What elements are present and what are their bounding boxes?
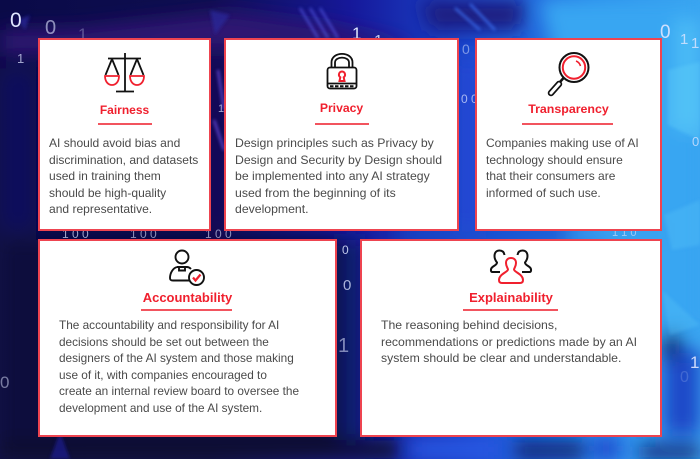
icon: padlock <box>326 53 358 90</box>
text: Transparency description <box>486 136 639 200</box>
panel: Explainability <box>360 239 662 437</box>
background: digital binary technology image: 0 <box>342 243 349 257</box>
panel: Transparency <box>475 38 662 231</box>
background: digital binary technology image: 0 <box>10 9 22 32</box>
text: Fairness description: used in training them <box>49 169 161 183</box>
background: digital binary technology image: 1 <box>680 31 688 48</box>
text: Transparency description: Companies making use of AI <box>486 136 639 150</box>
icon: magnifying glass <box>548 52 590 96</box>
panel: Privacy <box>224 38 459 231</box>
background: digital binary technology image: 0 0 <box>461 92 478 106</box>
text: Accountability description: The accountability and responsibility for AI <box>59 318 279 332</box>
text: Accountability description: decisions should be set out between the <box>59 335 269 349</box>
text: Transparency description: that their consumers are <box>486 169 615 183</box>
background: digital binary technology image: 1 <box>352 24 361 43</box>
text: Accountability description <box>59 318 299 415</box>
text: Transparency description: informed of such use. <box>486 186 601 200</box>
background: digital binary technology image: 0 <box>343 277 351 294</box>
text: Fairness description: and representative. <box>49 202 152 216</box>
background: digital binary technology image: 1 <box>218 103 224 115</box>
text: Accountability description: use of it, with companies encouraged to <box>59 368 267 382</box>
heading: Transparency: Transparency <box>528 102 609 116</box>
background: digital binary technology image: 0 <box>660 22 671 43</box>
text: Privacy description: used from the beginning of its <box>235 186 396 200</box>
background: digital binary technology image: 0 <box>415 40 422 55</box>
background: digital binary technology image: 1 <box>78 25 87 44</box>
background: digital binary technology image: 1 <box>374 33 383 50</box>
text: Privacy description: Design principles such as Privacy by <box>235 136 434 150</box>
background: digital binary technology image: 1 0 0 <box>205 227 232 241</box>
text: Fairness description: discrimination, and datasets <box>49 153 198 167</box>
panel: Accountability <box>38 239 337 437</box>
text: Explainability description <box>381 318 637 365</box>
background: digital binary technology image: 1 <box>338 335 349 357</box>
text: Privacy description: Design and Security by Design should <box>235 153 442 167</box>
heading: Explainability: Explainability <box>469 290 553 305</box>
background: digital binary technology image: 0 <box>0 373 9 392</box>
background: digital binary technology image: 0 <box>45 17 56 39</box>
text: Accountability description: designers of the AI system and those making <box>59 351 294 365</box>
text: Accountability description: create an internal review board to oversee the <box>59 384 299 398</box>
heading: Privacy: Privacy <box>320 101 363 115</box>
text: Fairness description: AI should avoid bias and <box>49 136 180 150</box>
text: Accountability description: development and use of the AI system. <box>59 401 262 415</box>
text: Privacy description: be implemented into any AI strategy <box>235 169 430 183</box>
icon: three people group <box>490 250 532 284</box>
text: Fairness description <box>49 136 198 216</box>
panel: Fairness <box>38 38 211 231</box>
text: Explainability description: The reasoning behind decisions, <box>381 318 557 332</box>
icon: balance scales <box>104 53 145 92</box>
icon: person with check badge <box>169 250 205 286</box>
background: digital binary technology image: 0 <box>462 41 470 57</box>
text: Explainability description: system should be clear and understandable. <box>381 351 621 365</box>
background: digital binary technology image: 0 <box>394 37 402 54</box>
heading: Fairness: Fairness <box>100 103 149 117</box>
background: digital binary technology image: 1 <box>690 353 699 372</box>
text: Privacy description <box>235 136 442 216</box>
text: Fairness description: should be high-quality <box>49 186 166 200</box>
background: digital binary technology image: 1 <box>17 51 24 66</box>
heading: Accountability: Accountability <box>143 290 232 305</box>
background: digital binary technology image: 0 <box>680 369 689 386</box>
background: digital binary technology image: 0 <box>692 134 699 149</box>
background: digital binary technology image: 1 <box>691 35 699 52</box>
text: Explainability description: recommendations or predictions made by an AI <box>381 335 637 349</box>
background: digital binary technology image: 1 0 0 <box>130 227 157 241</box>
background: digital binary technology image: 1 0 0 <box>62 227 89 241</box>
text: Privacy description: development. <box>235 202 309 216</box>
background: digital binary technology image: 1 1 0 <box>612 227 636 239</box>
text: Transparency description: technology should ensure <box>486 153 623 167</box>
